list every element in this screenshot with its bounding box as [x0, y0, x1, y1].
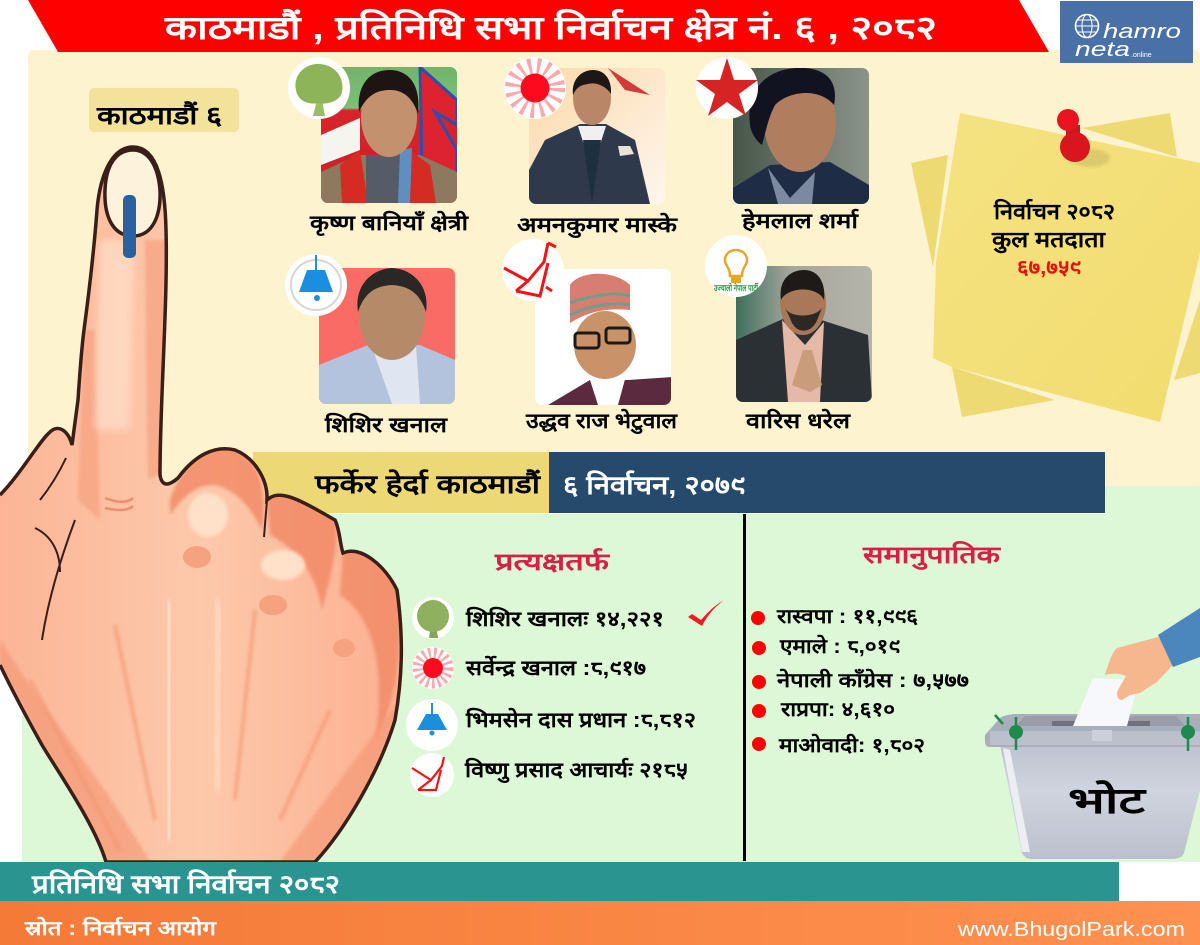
row: sun candidate [412, 647, 646, 689]
heading band: look back: ६ निर्वाचन, २०७९ [563, 470, 746, 500]
panel: green lower background [22, 486, 1200, 862]
heading: direct: प्रत्यक्षतर्फ [494, 548, 611, 576]
hand outline [0, 147, 401, 862]
row: RSP: रास्वपा : ११,९९६ [776, 606, 919, 628]
panel: candidate 5 [502, 239, 678, 435]
icon: tree symbol [288, 57, 350, 119]
panel: cream upper background [28, 50, 1200, 490]
illustration: ballot box with hand [985, 608, 1200, 859]
name: candidate 5: उद्धव राज भेटुवाल [525, 408, 678, 435]
photo: candidate 1 [321, 67, 457, 203]
footer band: source and website [0, 901, 1200, 945]
panel: candidate 1 [288, 57, 470, 237]
row: tree candidate: शिशिर खनालः १४,२२१ [465, 606, 664, 631]
footer band: source and website: स्रोत : निर्वाचन आयोग [24, 916, 217, 940]
row: UML: एमाले : ८,०१९ [779, 634, 901, 658]
icon: sun symbol [504, 57, 566, 119]
name: candidate 2: अमनकुमार मास्के [517, 212, 678, 239]
hand shading [0, 240, 400, 862]
panel: direct election results [406, 548, 724, 797]
row: bell candidate: भिमसेन दास प्रधान :८,८१२ [465, 707, 696, 732]
note text: निर्वाचन २०८२ [993, 198, 1115, 224]
footer band: election title [0, 862, 1119, 901]
green seals [1009, 725, 1023, 739]
photo: candidate 5 [535, 269, 672, 405]
row: RPP: राप्रपा: ४,६१० [780, 699, 895, 721]
icon: bulb symbol [705, 235, 767, 297]
footer band: source and website: www.BhugolPark.com [957, 919, 1185, 941]
icon: push pin [1057, 109, 1110, 167]
heading band: look back [253, 452, 1105, 513]
panel: candidate 6 [705, 235, 872, 433]
logo: hamro neta [1060, 1, 1193, 63]
row: bell candidate [406, 699, 696, 751]
photo: candidate 6 [736, 266, 872, 402]
icon: winner check mark [688, 600, 724, 626]
name: candidate 6: वारिस धरेल [745, 408, 851, 433]
name: candidate 3: हेमलाल शर्मा [741, 208, 860, 233]
panel: candidate 3 [696, 57, 869, 233]
ballot paper [1073, 678, 1139, 726]
row: tree candidate [412, 597, 664, 639]
illustration: voting hand with inked finger [0, 147, 401, 862]
heading band: look back: फर्केर हेर्दा काठमाडौं [314, 469, 542, 499]
shirt sleeve [1158, 608, 1200, 667]
panel: candidate 2 [504, 57, 678, 239]
title banner: काठमाडौं , प्रतिनिधि सभा निर्वाचन क्षेत्र नं. ६ , २०८२ [164, 8, 937, 46]
photo: candidate 4 [319, 268, 455, 404]
photo: candidate 2 [529, 68, 665, 204]
ballot box body [1000, 745, 1200, 859]
fingernail with ink mark [105, 150, 160, 258]
logo: hamro neta: hamro [1103, 21, 1181, 43]
row: Congress [752, 668, 969, 692]
row: Maoist: माओवादी: १,८०२ [778, 733, 925, 757]
icon: bulb symbol: उज्यालो नेपाल पार्टी [713, 282, 758, 293]
row: UML [752, 634, 901, 658]
row: sun candidate: सर्वेन्द्र खनाल :८,९१७ [465, 655, 646, 680]
voting hand [1105, 637, 1178, 700]
icon: star symbol [696, 57, 758, 119]
sticky note with total voters [911, 109, 1200, 422]
photo: candidate 3 [733, 68, 869, 204]
row: plough candidate: विष्णु प्रसाद आचार्यः २१८५ [464, 757, 688, 784]
logo: hamro neta: .online [1131, 52, 1152, 59]
note text: कुल मतदाता [991, 227, 1106, 254]
ballot box lid [985, 714, 1200, 747]
title banner [28, 0, 1049, 52]
row: Congress: नेपाली काँग्रेस : ७,५७७ [776, 668, 969, 692]
note text: ६७,७५९ [1017, 257, 1082, 279]
divider between columns [743, 514, 746, 861]
logo: hamro neta: neta [1075, 39, 1130, 61]
icon: bell symbol [285, 254, 347, 316]
name: candidate 1: कृष्ण बानियाँ क्षेत्री [309, 210, 470, 237]
panel: candidate 4 [285, 254, 455, 437]
heading: proportional: समानुपातिक [862, 541, 1002, 570]
label: district name [89, 88, 239, 132]
footer band: election title: प्रतिनिधि सभा निर्वाचन २०८२ [31, 869, 340, 899]
row: Maoist [752, 733, 925, 757]
panel: proportional results [751, 541, 1002, 757]
thumb crease [35, 458, 267, 640]
ballot box label: भोट [1068, 780, 1148, 821]
row: plough candidate [410, 753, 688, 797]
note text [991, 198, 1115, 279]
label: district name: काठमाडौं ६ [96, 101, 222, 130]
icon: plough symbol [502, 239, 564, 301]
name: candidate 4: शिशिर खनाल [324, 412, 448, 437]
